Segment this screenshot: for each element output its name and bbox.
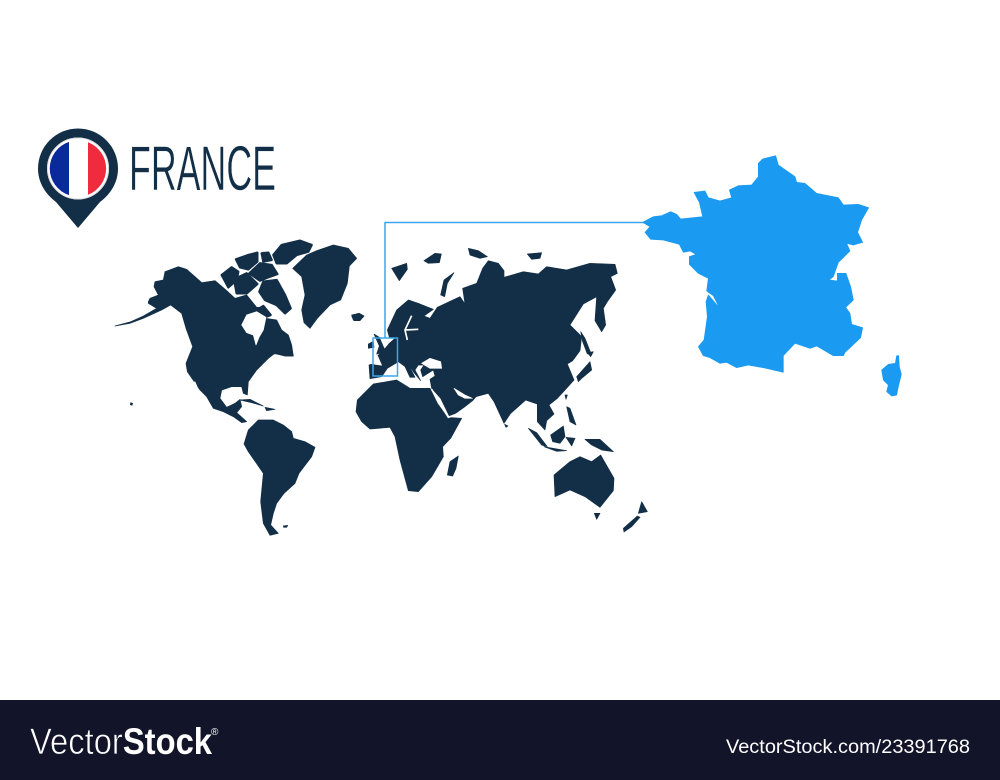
map pin with French flag <box>38 128 118 228</box>
Franz Josef Land <box>424 253 441 263</box>
Gulf of California <box>194 382 202 398</box>
New Zealand <box>638 502 647 513</box>
Persian Gulf <box>454 388 472 398</box>
Hudson Bay <box>242 312 266 345</box>
VectorStock logo: VectorStock <box>30 721 212 762</box>
Sri Lanka <box>505 424 508 427</box>
image id: VectorStock.com/23391768 <box>726 737 970 758</box>
Madagascar <box>447 456 458 476</box>
Japan <box>577 362 592 382</box>
title: FRANCE: FRANCE <box>129 134 276 204</box>
New Guinea <box>585 439 613 452</box>
North America <box>115 267 293 423</box>
mainland France <box>643 156 869 372</box>
footer bar <box>0 700 1000 780</box>
Taiwan and Philippines <box>565 395 567 399</box>
Iceland <box>352 313 364 321</box>
Java <box>544 447 567 451</box>
Africa <box>356 380 462 492</box>
Eurasia, Africa, Oceania <box>352 248 647 532</box>
Black Sea <box>422 358 442 368</box>
Sakhalin <box>581 332 591 354</box>
world map <box>115 241 647 535</box>
Great Britain <box>374 334 386 354</box>
Cuba and Caribbean <box>240 399 263 406</box>
Iceland <box>352 313 364 321</box>
Americas <box>115 241 364 535</box>
Falklands <box>283 525 288 527</box>
registered mark: ® <box>211 727 219 738</box>
Baltic Sea <box>405 316 418 340</box>
Australia <box>554 455 614 507</box>
Sulawesi <box>566 437 575 446</box>
Corsica <box>882 356 901 396</box>
Borneo <box>551 426 565 443</box>
Eurasia <box>369 261 617 430</box>
Red Sea and Gulf of Aden <box>432 389 463 417</box>
Tasmania <box>594 513 600 519</box>
Novaya Zemlya <box>441 273 454 297</box>
Sumatra <box>528 428 547 447</box>
Hawaii <box>130 403 133 405</box>
Greenland <box>293 245 357 328</box>
Ireland <box>368 341 374 348</box>
Svalbard <box>392 263 407 281</box>
South America <box>244 420 315 535</box>
Arctic islands <box>222 241 312 317</box>
Arctic islands <box>468 248 487 258</box>
connector line and locator box <box>373 222 645 376</box>
France enlarged map <box>643 156 901 396</box>
